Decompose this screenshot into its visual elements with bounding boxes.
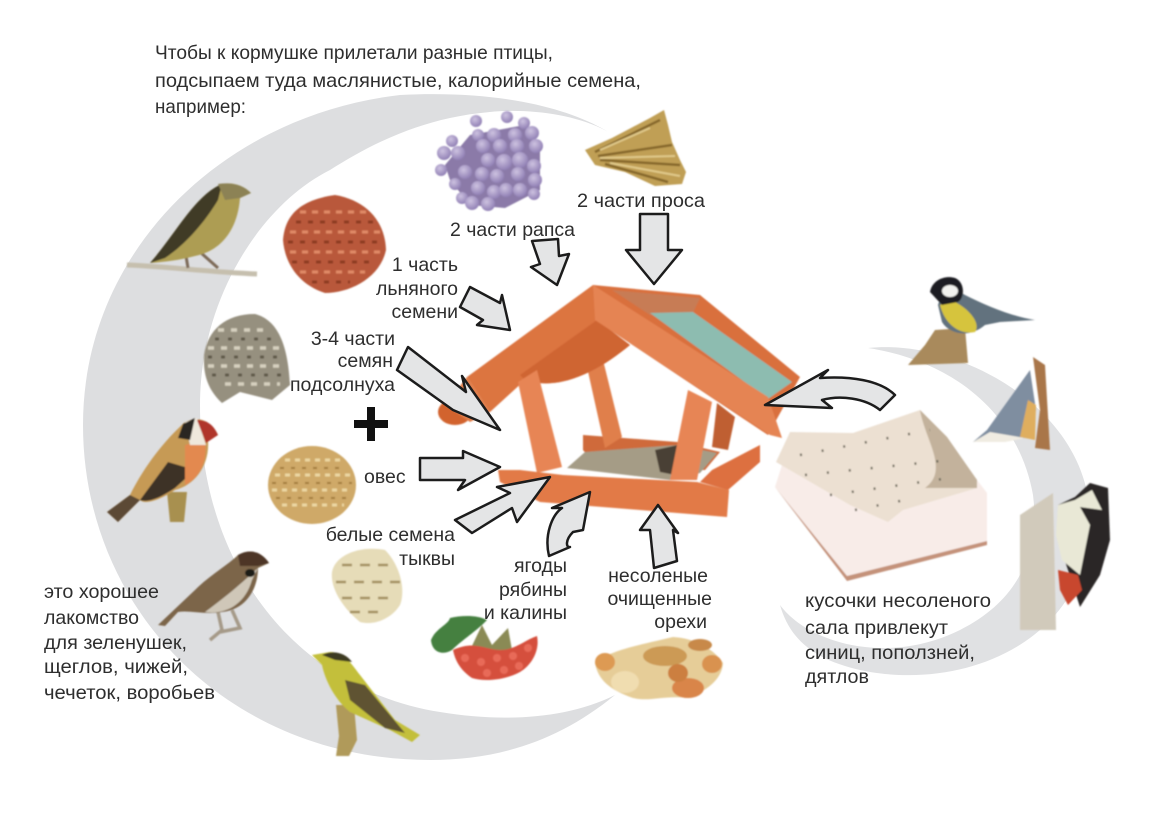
icon: millet	[585, 110, 686, 186]
back post	[587, 360, 622, 448]
intro text	[155, 42, 641, 118]
intro text: Чтобы к кормушке прилетали разные птицы,	[155, 42, 553, 64]
icon: goldfinch	[107, 418, 218, 522]
labels: sunflower	[290, 328, 395, 396]
roof left slope	[467, 285, 630, 412]
text: lard: синиц, поползней,	[805, 642, 975, 664]
icon: woodpecker	[1020, 483, 1110, 630]
text: lard: сала привлекут	[805, 617, 948, 639]
icon: oats	[268, 446, 356, 524]
icon: great tit	[908, 277, 1035, 365]
roof glass panel	[650, 312, 792, 399]
labels: sunflower: подсолнуха	[290, 374, 395, 396]
icon: nuts	[595, 637, 723, 699]
labels: nuts: орехи	[654, 611, 707, 633]
icon: bird feeder	[438, 285, 800, 517]
text: treat: лакомство	[44, 607, 139, 629]
icon: pumpkin seeds	[332, 549, 402, 623]
arrow: oats	[420, 451, 500, 490]
roof left end ball	[438, 399, 472, 425]
labels: flax	[376, 254, 458, 323]
icon: rowan berries	[431, 616, 538, 680]
text: treat: это хорошее	[44, 581, 159, 603]
left grey crescent background	[83, 94, 615, 760]
feed	[567, 445, 717, 480]
text: lard: дятлов	[805, 666, 869, 688]
labels: pumpkin	[326, 524, 455, 570]
feeder tray right side	[700, 445, 760, 490]
text: treat: для зеленушек,	[44, 632, 187, 654]
text: treat	[44, 581, 215, 704]
labels: nuts	[607, 565, 712, 633]
icon: rapeseed	[435, 111, 543, 211]
arrow: pumpkin	[455, 477, 550, 533]
front left post	[518, 370, 562, 473]
icon: flax seeds	[283, 195, 386, 293]
roof underside	[520, 320, 630, 383]
tray front beam	[498, 470, 729, 517]
icon: greenfinch	[127, 183, 257, 274]
labels: pumpkin: белые семена	[326, 524, 455, 546]
labels: nuts: очищенные	[607, 588, 712, 610]
labels: flax: 1 часть	[392, 254, 458, 276]
lard top	[776, 410, 977, 522]
icon: plus	[354, 407, 388, 441]
far right post	[712, 403, 735, 450]
lard front	[775, 440, 987, 576]
labels: sunflower: семян	[338, 350, 393, 372]
roof right slope	[593, 285, 800, 435]
icon: siskin	[312, 652, 420, 756]
roof front beam	[593, 285, 782, 438]
arrow: millet	[626, 214, 682, 284]
labels: berries	[484, 555, 567, 624]
feeder tray back	[583, 435, 720, 470]
labels: berries: рябины	[499, 579, 567, 601]
text: lard: кусочки несоленого	[805, 590, 991, 612]
arrow: flax	[460, 287, 510, 330]
icon: lard	[775, 410, 987, 581]
intro text: например:	[155, 96, 246, 118]
lard seasoning	[920, 410, 977, 488]
lard rim	[775, 487, 987, 581]
labels: flax: льняного	[376, 278, 458, 300]
labels: berries: и калины	[484, 602, 567, 624]
text: treat: чечеток, воробьев	[44, 682, 215, 704]
labels: pumpkin: тыквы	[399, 548, 455, 570]
text: treat: щеглов, чижей,	[44, 656, 188, 678]
icon: nuthatch	[973, 357, 1050, 450]
labels: nuts: несоленые	[608, 565, 708, 587]
feed dark patch	[655, 445, 678, 475]
right grey crescent background	[780, 347, 1090, 675]
icon: sunflower seeds	[204, 314, 290, 403]
arrow: sunflower	[397, 347, 500, 430]
roof left end	[445, 377, 490, 422]
text: lard	[805, 590, 991, 688]
label: 2 части проса: 2 части проса	[577, 190, 705, 212]
label: oats: овес	[364, 466, 406, 488]
front right post	[670, 390, 712, 480]
intro text: подсыпаем туда маслянистые, калорийные семена,	[155, 70, 641, 92]
roof back boards	[612, 290, 700, 315]
labels: sunflower: 3-4 части	[311, 328, 395, 350]
arrow: rapeseed	[531, 239, 569, 285]
arrow: nuts	[640, 505, 678, 568]
labels: flax: семени	[391, 301, 458, 323]
label: 2 части рапса: 2 части рапса	[450, 219, 575, 241]
arrow: berries	[547, 492, 590, 556]
arrow: lard	[765, 370, 895, 410]
icon: sparrow	[158, 552, 269, 640]
labels: berries: ягоды	[514, 555, 567, 577]
